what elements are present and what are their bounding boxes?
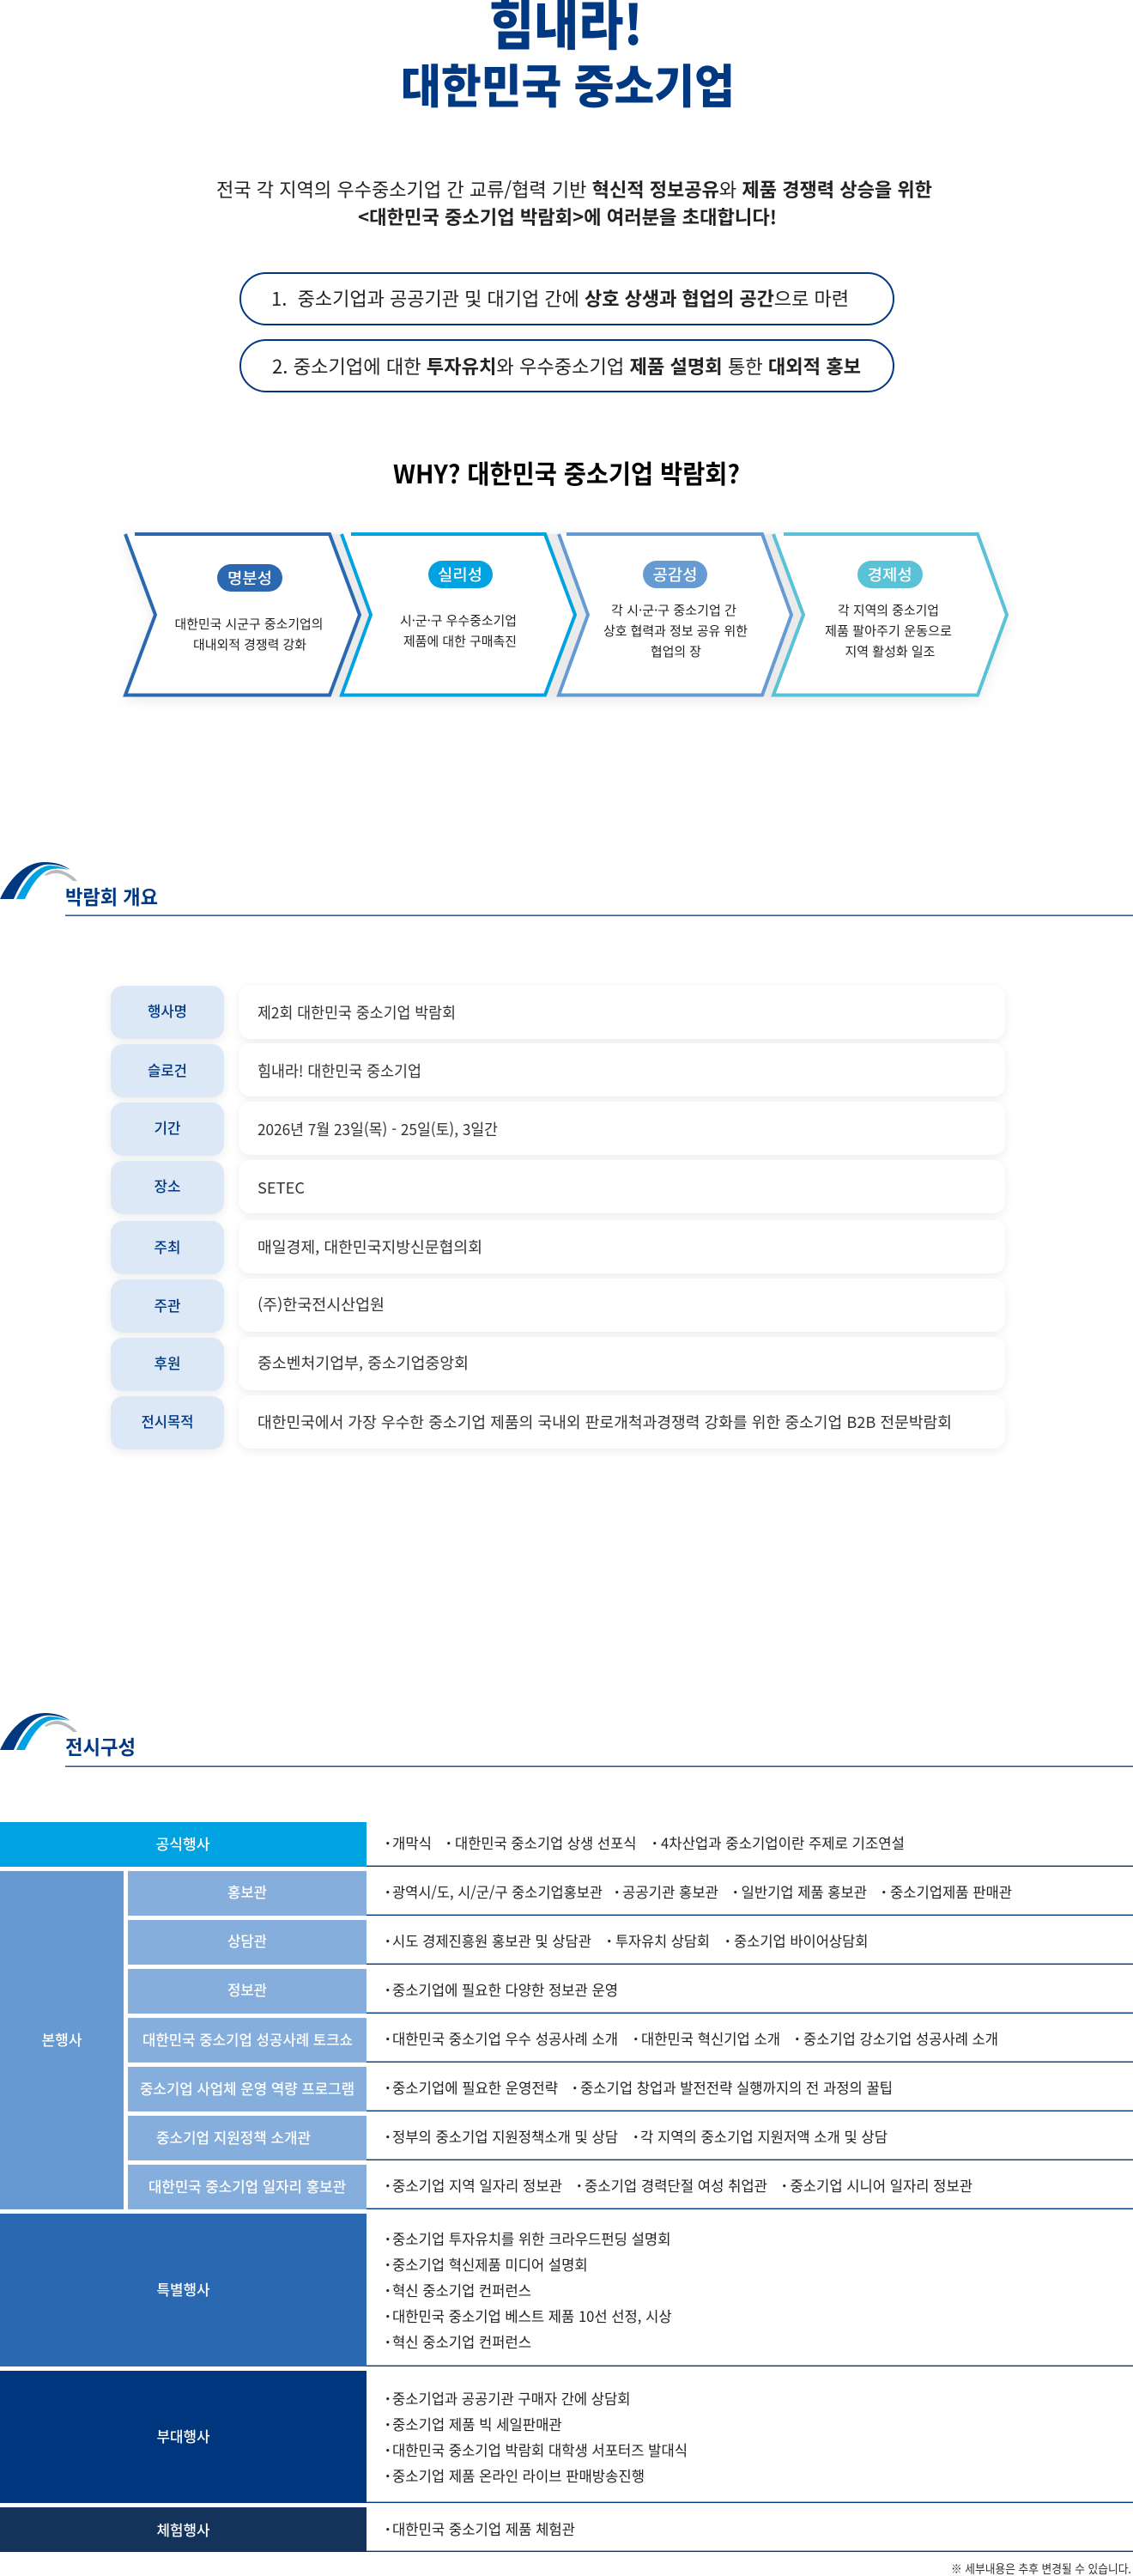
row: 운영 역량 프로그램: 중소기업 창업과 발전전략 실행까지의 전 과정의 꿀팁 <box>580 2076 893 2098</box>
chevron: 경제성: 경제성 <box>868 563 912 586</box>
row: 전시목적: 대한민국에서 가장 우수한 중소기업 제품의 국내외 판로개척과경쟁력 강화를 위한 중소기업 B2B 전문박람회 <box>258 1411 952 1433</box>
section header: 전시구성 <box>0 1713 1133 1767</box>
row: 전시목적 <box>111 1395 1005 1449</box>
row: 홍보관: 홍보관 <box>227 1880 267 1902</box>
row: 성공사례 토크쇼: · <box>633 2027 639 2049</box>
chevron: 명분성: 대한민국 시군구 중소기업의 <box>175 615 323 633</box>
chevron: 실리성: 실리성 <box>438 563 482 586</box>
row: 정보관: 중소기업에 필요한 다양한 정보관 운영 <box>392 1978 618 2000</box>
row: 성공사례 토크쇼: 대한민국 중소기업 우수 성공사례 소개 <box>392 2027 618 2049</box>
row: 일자리 홍보관: 중소기업 시니어 일자리 정보관 <box>790 2174 972 2196</box>
row: 행사명: 행사명 <box>148 999 187 1021</box>
chevron: 경제성: 각 지역의 중소기업 <box>838 601 939 619</box>
row: 정보관: 정보관 <box>227 1978 267 2000</box>
row: 장소 <box>111 1160 1005 1214</box>
block: 본행사 <box>0 1871 124 2209</box>
section header: 박람회 개요: 박람회 개요 <box>65 881 158 910</box>
row: 상담관 <box>128 1920 1133 1965</box>
row: 홍보관: · <box>882 1880 887 1902</box>
row: 행사명: 제2회 대한민국 중소기업 박람회 <box>258 1001 456 1024</box>
row: 부대행사: · <box>385 2439 391 2460</box>
row: 지원정책 소개관: · <box>385 2125 391 2147</box>
row: 홍보관: · <box>385 1880 391 1902</box>
row: 공식행사: 대한민국 중소기업 상생 선포식 <box>455 1832 637 1853</box>
row: 후원: 후원 <box>154 1352 180 1373</box>
chevron: 명분성: 대내외적 경쟁력 강화 <box>193 635 306 653</box>
intro text: 전국 각 지역의 우수중소기업 간 교류/협력 기반 혁신적 정보공유와 제품 경쟁력 상승을 위한 <box>216 175 932 203</box>
row: 특별행사: 중소기업 혁신제품 미디어 설명회 <box>392 2253 588 2275</box>
chevron: 공감성: 상호 협력과 정보 공유 위한 <box>603 622 748 640</box>
row: 후원 <box>111 1337 1005 1391</box>
chevron: 경제성 <box>773 534 1007 696</box>
row: 일자리 홍보관: · <box>385 2174 391 2196</box>
pill: goal 2: 2. 중소기업에 대한 투자유치와 우수중소기업 제품 설명회 통한 대외적 홍보 <box>272 352 861 380</box>
row: 특별행사: 특별행사 <box>156 2278 210 2300</box>
chevron: 명분성 <box>125 534 360 696</box>
row: 지원정책 소개관: 각 지역의 중소기업 지원저액 소개 및 상담 <box>640 2125 888 2147</box>
row: 공식행사: · <box>652 1832 657 1853</box>
row: 특별행사: · <box>385 2227 391 2249</box>
row: 상담관: 상담관 <box>227 1929 267 1951</box>
row: 체험행사: 체험행사 <box>156 2518 210 2540</box>
row: 상담관: · <box>725 1929 730 1951</box>
row: 성공사례 토크쇼: 대한민국 중소기업 성공사례 토크쇼 <box>142 2028 353 2050</box>
row: 일자리 홍보관: 중소기업 경력단절 여성 취업관 <box>585 2174 767 2196</box>
pill: goal 1: 1. 중소기업과 공공기관 및 대기업 간에 상호 상생과 협업의 공간으로 마련 <box>271 284 849 312</box>
pill: goal 2 <box>240 340 894 392</box>
row: 성공사례 토크쇼: 중소기업 강소기업 성공사례 소개 <box>803 2027 998 2049</box>
row: 특별행사: 중소기업 투자유치를 위한 크라우드펀딩 설명회 <box>392 2227 671 2249</box>
chevron: 실리성: 제품에 대한 구매촉진 <box>403 632 517 650</box>
row: 특별행사: · <box>385 2279 391 2300</box>
row: 주최: 매일경제, 대한민국지방신문협의회 <box>258 1236 482 1258</box>
row: 특별행사: · <box>385 2305 391 2326</box>
row: 장소: SETEC <box>258 1176 305 1199</box>
row: 정보관: · <box>385 1978 391 2000</box>
row: 슬로건 <box>111 1043 1005 1097</box>
row: 부대행사: · <box>385 2387 391 2409</box>
row: 행사명 <box>111 986 1005 1039</box>
row: 일자리 홍보관: · <box>782 2174 787 2196</box>
row: 운영 역량 프로그램 <box>128 2067 1133 2111</box>
row: 성공사례 토크쇼: · <box>795 2027 800 2049</box>
icon: arc <box>0 862 77 899</box>
row: 공식행사: 개막식 <box>392 1832 432 1853</box>
row: 기간: 기간 <box>154 1116 181 1138</box>
panel: overview table <box>111 986 1005 1449</box>
row: 슬로건: 힘내라! 대한민국 중소기업 <box>258 1060 421 1082</box>
chevron: 경제성: 제품 팔아주기 운동으로 <box>825 622 952 640</box>
block: 본행사: 본행사 <box>41 2028 82 2050</box>
row: 상담관: · <box>607 1929 612 1951</box>
row: 홍보관: 중소기업제품 판매관 <box>890 1880 1012 1902</box>
chevron process <box>125 534 1007 696</box>
row: 공식행사: · <box>446 1832 451 1853</box>
row: 상담관: · <box>385 1929 391 1951</box>
row: 부대행사: 부대행사 <box>156 2425 210 2446</box>
chevron: 명분성: 명분성 <box>227 567 272 589</box>
row: 체험행사: 대한민국 중소기업 제품 체험관 <box>392 2518 575 2539</box>
row: 공식행사: · <box>385 1832 391 1853</box>
row: 체험행사 <box>0 2507 1133 2552</box>
chevron: 공감성: 공감성 <box>652 563 697 586</box>
row: 부대행사: 중소기업과 공공기관 구매자 간에 상담회 <box>392 2387 630 2409</box>
section header: 박람회 개요 <box>0 862 1133 916</box>
row: 홍보관: 공공기관 홍보관 <box>622 1880 718 1902</box>
row: 부대행사: · <box>385 2413 391 2434</box>
row: 특별행사: · <box>385 2330 391 2352</box>
row: 지원정책 소개관: · <box>633 2125 639 2147</box>
row: 일자리 홍보관: 대한민국 중소기업 일자리 홍보관 <box>148 2175 346 2196</box>
row: 특별행사: · <box>385 2253 391 2275</box>
row: 특별행사: 혁신 중소기업 컨퍼런스 <box>392 2279 531 2300</box>
row: 주최: 주최 <box>154 1236 180 1257</box>
row: 지원정책 소개관: 중소기업 지원정책 소개관 <box>156 2126 311 2148</box>
row: 운영 역량 프로그램: 중소기업에 필요한 운영전략 <box>392 2076 558 2098</box>
chevron: 실리성 <box>342 534 575 696</box>
row: 주관 <box>111 1279 1005 1333</box>
row: 상담관: 중소기업 바이어상담회 <box>734 1929 869 1951</box>
row: 특별행사: 대한민국 중소기업 베스트 제품 10선 선정, 시상 <box>392 2305 672 2326</box>
row: 상담관: 투자유치 상담회 <box>615 1929 710 1951</box>
row: 성공사례 토크쇼 <box>128 2018 1133 2063</box>
chevron: 공감성: 협업의 장 <box>651 642 701 660</box>
row: 후원: 중소벤처기업부, 중소기업중앙회 <box>258 1352 469 1374</box>
row: 주최 <box>111 1220 1005 1274</box>
row: 홍보관: 광역시/도, 시/군/구 중소기업홍보관 <box>392 1880 603 1902</box>
row: 일자리 홍보관: 중소기업 지역 일자리 정보관 <box>392 2174 562 2196</box>
row: 홍보관: · <box>733 1880 738 1902</box>
row: 전시목적: 전시목적 <box>141 1410 194 1431</box>
section header: 전시구성: 전시구성 <box>65 1731 136 1760</box>
row: 성공사례 토크쇼: 대한민국 혁신기업 소개 <box>641 2027 780 2049</box>
row: 장소: 장소 <box>154 1175 180 1196</box>
chevron: 공감성 <box>559 534 791 696</box>
row: 일자리 홍보관 <box>128 2165 1133 2209</box>
row: 홍보관: · <box>615 1880 620 1902</box>
heading: why: WHY? 대한민국 중소기업 박람회? <box>393 453 740 491</box>
row: 공식행사: 4차산업과 중소기업이란 주제로 기조연설 <box>661 1832 905 1853</box>
chevron: 공감성: 각 시·군·구 중소기업 간 <box>611 601 736 619</box>
title <box>401 0 735 117</box>
row: 운영 역량 프로그램: 중소기업 사업체 운영 역량 프로그램 <box>140 2077 354 2099</box>
row: 정보관 <box>128 1969 1133 2014</box>
row: 부대행사 <box>0 2371 1133 2503</box>
intro text <box>216 175 932 230</box>
chevron: 실리성: 시·군·구 우수중소기업 <box>400 611 517 629</box>
row: 슬로건: 슬로건 <box>148 1059 187 1080</box>
row: 홍보관 <box>128 1871 1133 1916</box>
row: 체험행사: · <box>385 2518 391 2539</box>
row: 운영 역량 프로그램: · <box>385 2076 391 2098</box>
row: 지원정책 소개관: 정부의 중소기업 지원정책소개 및 상담 <box>392 2125 618 2147</box>
panel: exhibition table <box>0 1822 1133 2552</box>
intro text: <대한민국 중소기업 박람회>에 여러분을 초대합니다! <box>358 203 777 230</box>
chevron: 경제성: 지역 활성화 일조 <box>845 642 936 660</box>
row: 공식행사: 공식행사 <box>156 1832 210 1854</box>
row: 공식행사 <box>0 1822 1133 1867</box>
row: 성공사례 토크쇼: · <box>385 2027 391 2049</box>
row: 주관: (주)한국전시산업원 <box>258 1293 385 1315</box>
pill: goal 1 <box>240 273 894 325</box>
row: 일자리 홍보관: · <box>577 2174 582 2196</box>
row: 특별행사 <box>0 2214 1133 2366</box>
row: 특별행사: 혁신 중소기업 컨퍼런스 <box>392 2330 531 2352</box>
icon: arc <box>0 1713 77 1750</box>
row: 홍보관: 일반기업 제품 홍보관 <box>742 1880 867 1902</box>
row: 기간 <box>111 1102 1005 1156</box>
title: 대한민국 중소기업 <box>401 49 735 117</box>
row: 부대행사: 중소기업 제품 온라인 라이브 판매방송진행 <box>392 2464 645 2486</box>
row: 지원정책 소개관 <box>128 2116 1133 2160</box>
row: 운영 역량 프로그램: · <box>573 2076 578 2098</box>
row: 기간: 2026년 7월 23일(목) - 25일(토), 3일간 <box>258 1118 498 1140</box>
row: 부대행사: 대한민국 중소기업 박람회 대학생 서포터즈 발대식 <box>392 2439 688 2460</box>
row: 부대행사: · <box>385 2464 391 2486</box>
row: 주관: 주관 <box>154 1294 181 1315</box>
row: 부대행사: 중소기업 제품 빅 세일판매관 <box>392 2413 562 2434</box>
row: 상담관: 시도 경제진흥원 홍보관 및 상담관 <box>392 1929 591 1951</box>
